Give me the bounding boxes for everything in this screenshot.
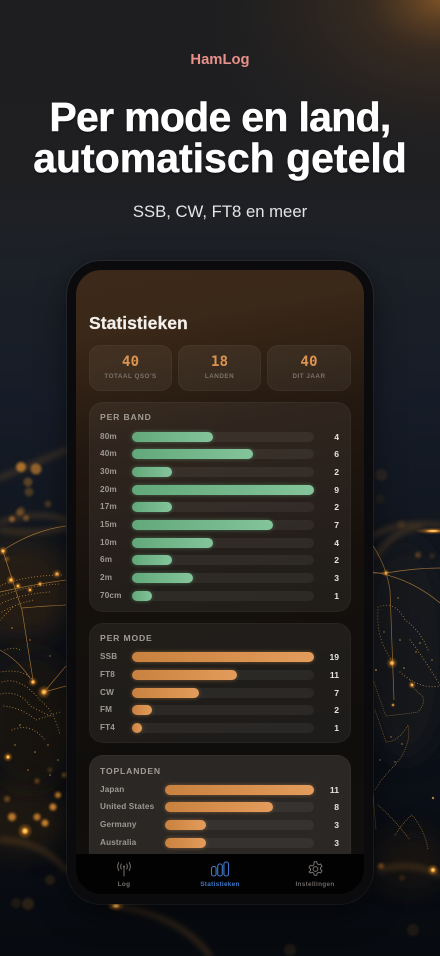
tab label: statistieken: Statistieken <box>200 881 240 888</box>
bar United States: 8 <box>334 802 339 812</box>
heading: per band: PER BAND <box>100 412 152 422</box>
brand name: HamLog <box>190 52 250 68</box>
bar 17m <box>100 500 339 514</box>
bar 40m: 6 <box>334 449 339 459</box>
bar 17m: 17m <box>100 502 117 511</box>
stat card: dit jaar: 40 <box>300 354 318 370</box>
bar 10m: 10m <box>100 538 117 547</box>
bar 10m: 4 <box>334 538 339 548</box>
bar 40m: 40m <box>100 449 117 458</box>
bar 80m: 80m <box>100 432 117 441</box>
bar 6m: 6m <box>100 555 112 564</box>
stat card: dit jaar: DIT JAAR <box>292 373 326 380</box>
bar FM: 2 <box>334 705 339 715</box>
bar Germany: 3 <box>334 820 339 830</box>
bar 40m <box>100 446 339 462</box>
stat card: landen <box>178 345 261 391</box>
bar 15m: 15m <box>100 520 117 529</box>
phone frame <box>67 261 373 904</box>
stat card: totaal: 40 <box>122 354 139 370</box>
tab bar <box>76 854 364 894</box>
bar FT4 <box>100 721 339 735</box>
bar 80m: 4 <box>334 432 339 442</box>
icon: antenna <box>117 862 131 876</box>
panel: toplanden <box>89 755 351 865</box>
bar Australia <box>100 836 339 850</box>
bar 70cm <box>100 588 339 604</box>
bar 2m <box>100 570 339 586</box>
bar 6m: 2 <box>334 555 339 565</box>
bar FM <box>100 702 339 718</box>
bar FT8 <box>100 668 339 682</box>
bar 30m: 30m <box>100 467 117 476</box>
bar FM: FM <box>100 705 112 714</box>
icon: gear <box>308 861 322 876</box>
bar CW: CW <box>100 688 114 697</box>
bar SSB <box>100 650 339 664</box>
subtitle: SSB, CW, FT8 en meer <box>133 202 307 221</box>
bar 70cm: 70cm <box>100 591 122 600</box>
bar 15m: 7 <box>334 520 339 530</box>
phone screen <box>76 270 364 894</box>
bar Germany: Germany <box>100 820 137 829</box>
bar 80m <box>100 430 339 444</box>
bar Japan: 11 <box>330 785 339 795</box>
bar CW: 7 <box>334 688 339 698</box>
bar Australia: Australia <box>100 838 136 847</box>
bar 70cm: 1 <box>334 591 339 601</box>
bar FT8: 11 <box>330 670 339 680</box>
panel: per mode <box>89 623 351 743</box>
headline: Per mode en land, <box>49 94 391 140</box>
headline <box>33 94 407 732</box>
bar United States: United States <box>100 802 154 811</box>
stat card: totaal <box>89 345 172 391</box>
tab label: log: Log <box>118 881 130 888</box>
bar 30m <box>100 464 339 480</box>
heading: toplanden: TOPLANDEN <box>100 766 161 776</box>
panel: per band <box>89 402 351 612</box>
bar 17m: 2 <box>334 502 339 512</box>
bar Japan <box>100 782 339 798</box>
bar Australia: 3 <box>334 838 339 848</box>
bar Japan: Japan <box>100 785 124 794</box>
bar 10m <box>100 536 339 550</box>
headline: automatisch geteld <box>33 135 407 181</box>
bar 30m: 2 <box>334 467 339 477</box>
icon: bar chart <box>210 862 230 876</box>
tab label: instellingen: Instellingen <box>295 881 335 888</box>
bar FT8: FT8 <box>100 670 115 679</box>
stat card: dit jaar <box>267 345 351 391</box>
bar CW <box>100 686 339 700</box>
bar 20m <box>100 482 339 498</box>
stat card: totaal: TOTAAL QSO'S <box>104 373 157 380</box>
bar 2m: 2m <box>100 573 112 582</box>
bar 2m: 3 <box>334 573 339 583</box>
screen heading: Statistieken <box>89 313 188 333</box>
bar 15m <box>100 518 339 532</box>
heading: per mode: PER MODE <box>100 633 153 643</box>
bar SSB: 19 <box>329 652 339 662</box>
bar 6m <box>100 552 339 568</box>
stat card: landen: 18 <box>211 354 228 370</box>
bar 20m: 20m <box>100 485 117 494</box>
bar 20m: 9 <box>334 485 339 495</box>
bar FT4: 1 <box>334 723 339 733</box>
bar United States <box>100 800 339 814</box>
bar SSB: SSB <box>100 652 117 661</box>
stat card: landen: LANDEN <box>205 373 234 380</box>
bar Germany <box>100 818 339 832</box>
bar FT4: FT4 <box>100 723 115 732</box>
